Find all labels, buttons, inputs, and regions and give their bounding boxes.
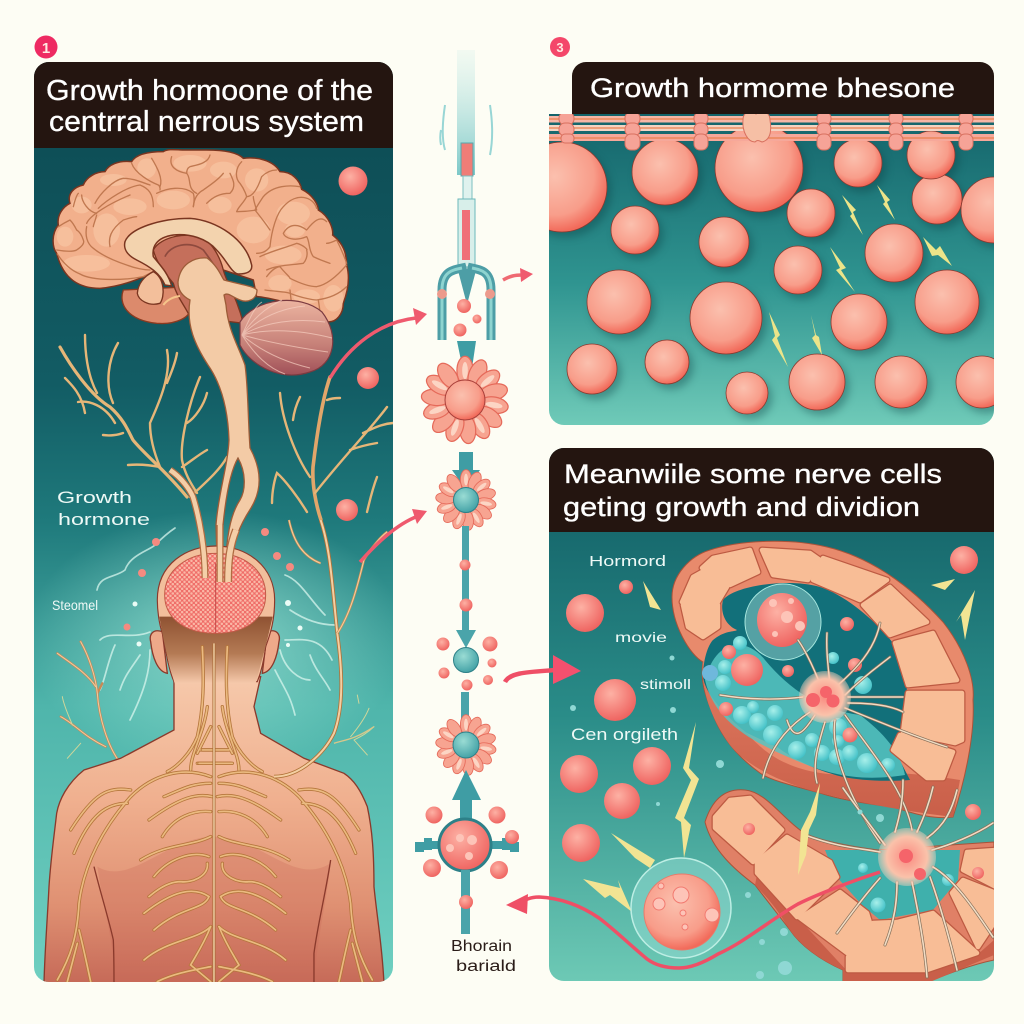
flower cell 2: [435, 470, 497, 531]
brain: lobe highlights: [57, 155, 343, 312]
lightning sparks around head: [97, 528, 335, 720]
figure: torso: [44, 677, 384, 983]
label: stimoll: stimoll: [640, 676, 691, 692]
heading: panel 2 title: Growth hormome bhesone: [590, 73, 955, 103]
small floating dots: [570, 656, 884, 979]
hormone bubble in ring: [719, 584, 862, 742]
membrane: [549, 112, 994, 150]
human figure: back and shoulders: [44, 520, 387, 983]
receptor node: [415, 806, 519, 879]
heading: panel 1 title: centrral nerrous system: [49, 106, 364, 138]
ring: cyan pool: [705, 645, 905, 778]
figure: exposed brain: [165, 553, 266, 633]
brain: inner chamber: [153, 235, 243, 323]
number badge 3: 3: [556, 40, 564, 55]
panel: central nervous system: [25, 62, 405, 983]
brain stem and spinal cord: [178, 258, 259, 565]
released hormones around teal cell: [436, 636, 498, 690]
lower tissue band: [705, 790, 996, 982]
lower tissue: blocks: [715, 798, 996, 970]
label: Growth hormone: hormone: [58, 510, 150, 529]
heading bar: panel 2: [572, 62, 994, 114]
flower cell 3: [435, 715, 497, 776]
heading: panel 3 title: geting growth and dividion: [563, 492, 920, 522]
glow dots near head: [132, 600, 302, 647]
label: Steomel: Steomel: [52, 597, 98, 613]
brain: cerebellum: [240, 300, 333, 375]
column: central signalling pathway: [415, 50, 519, 975]
lower tube: [459, 870, 473, 934]
heading bar: panel 3: [549, 448, 994, 532]
arrow: neuron back to column: [506, 872, 880, 968]
figure: head: [157, 546, 275, 682]
neuron lower: [805, 780, 993, 977]
label: Bhorain bariald: bariald: [456, 958, 516, 975]
fork receptor: [437, 268, 495, 340]
small cells in pocket: [743, 823, 984, 912]
heading: panel 3 title: [563, 459, 942, 522]
arrow: fork to panel 2: [503, 268, 533, 282]
label: Growth hormone: [58, 491, 149, 525]
hormone spheres, upper left panel: [336, 166, 379, 521]
ring: lower wall: [703, 660, 960, 817]
upper nerve trees: [60, 335, 393, 520]
brain: small connector: [163, 296, 180, 305]
dividing cell in bubble: [631, 858, 731, 958]
spheres: hormone cells: [549, 131, 994, 423]
heading: panel 1 title: [46, 75, 373, 138]
figure: body shade: [98, 836, 330, 930]
label: Cen orgileth: Cen orgileth: [571, 725, 678, 744]
heading: panel 1 title: Growth hormoone of the: [46, 75, 373, 107]
arrow: nerve to flower 2: [360, 509, 427, 562]
label: Growth hormone: Growth: [57, 488, 132, 507]
arrow tube segment 2: [452, 452, 480, 490]
arrow: brain to fork: [330, 308, 427, 378]
lower tissue: bottom wall: [755, 875, 994, 982]
brain: corpus callosum: [125, 218, 252, 286]
brain: anterior lobe: [137, 272, 163, 304]
label: movie: movie: [615, 629, 667, 645]
thin pale branch: [334, 727, 374, 743]
panel: nerve cell growth and division: [549, 448, 996, 982]
figure: spine: [212, 644, 216, 982]
lightning: panel 3: [583, 579, 975, 912]
ring: blocks: [682, 550, 962, 778]
arrow: column to panel 3: [505, 655, 581, 684]
nerve strands entering head: [170, 470, 236, 582]
right big nerve: [274, 520, 341, 777]
ring: outer body: [672, 541, 973, 818]
number badge 1: 1: [42, 40, 50, 57]
brain: cerebrum: [53, 150, 348, 322]
label: Hormord: Hormord: [589, 553, 666, 570]
tube segment 3: [461, 692, 469, 734]
teal cell cluster: [702, 636, 895, 773]
figure: arm creases: [94, 860, 331, 983]
figure: rib nerves left: [57, 647, 231, 982]
number badge 3: [550, 37, 570, 57]
brain: lower frontal lobe: [122, 287, 190, 324]
membrane clamps: [559, 112, 973, 150]
hormone spheres column: [560, 546, 981, 862]
figure: ears: [150, 631, 279, 673]
upward arrow: [452, 770, 481, 825]
figure: rib nerves right: [199, 647, 372, 982]
neuron upper: [720, 623, 947, 843]
brain: folds: [57, 155, 347, 313]
syringe tube: [440, 50, 492, 267]
brain: [53, 150, 348, 324]
heading: panel 3 title: Meanwiile some nerve cells: [564, 459, 942, 489]
funnel arrow: [457, 341, 476, 375]
figure: hairline shade: [159, 617, 273, 683]
number badge 1: [34, 36, 58, 58]
heading bar: panel 1: [34, 62, 393, 148]
curved tissue ring: [672, 541, 973, 818]
lightning: panel 2: [769, 185, 952, 367]
flower cell 1: [421, 356, 509, 444]
panel: growth hormone release: [549, 114, 994, 425]
small hormone dots near head: [124, 528, 294, 630]
label: Bhorain bariald: Bhorain: [451, 938, 512, 955]
nerve branches on left of shoulder: [56, 640, 118, 759]
label: Bhorain bariald: [451, 938, 516, 975]
ring: interior: [703, 583, 910, 781]
lower tissue: teal pocket: [825, 850, 960, 920]
vertical tube with arrowhead: [456, 526, 476, 648]
